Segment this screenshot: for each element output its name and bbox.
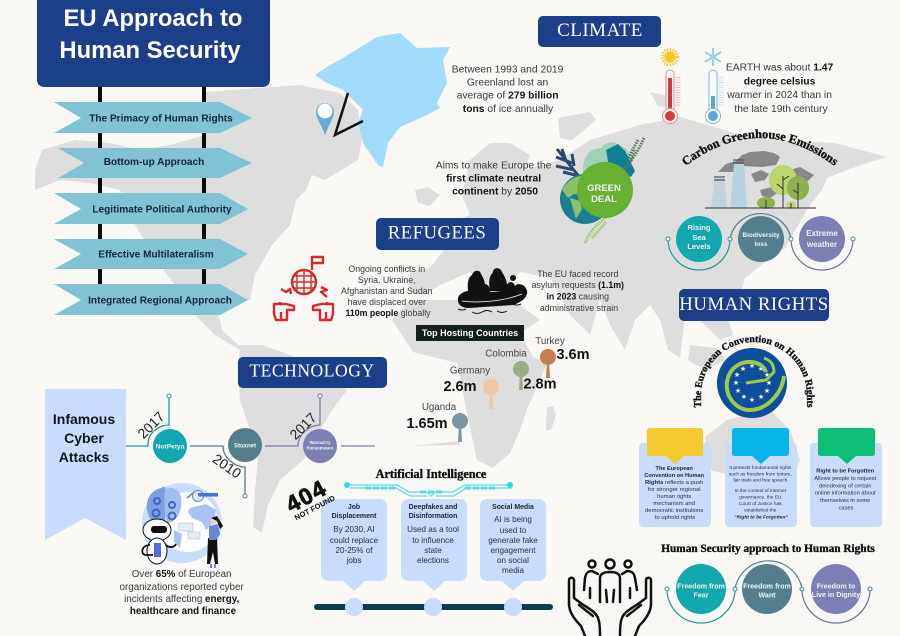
timeline: cyber attacks	[126, 394, 375, 498]
node: WannaCry 2017	[286, 409, 337, 463]
pin: Germany: Germany	[450, 366, 490, 376]
text: climate neutral: Aims to make Europe the	[436, 160, 552, 172]
circle: biodiversity loss: loss	[754, 241, 768, 248]
arrow: legitimate political authority	[54, 193, 248, 224]
text: earth warming: EARTH was about 1.47	[726, 62, 833, 74]
circle: freedom from want: Want	[758, 592, 776, 600]
card: European Convention: to uphold rights	[655, 515, 695, 521]
heading: technology	[238, 357, 387, 388]
text: Greenland ice loss: Greenland lost an	[467, 78, 548, 88]
icon: council of Europe logo: ★	[740, 365, 746, 373]
text: Greenland ice loss: Between 1993 and 2019	[452, 64, 564, 76]
card: deepfakes and disinformation: Used as a tool	[407, 525, 459, 534]
icon: council of Europe logo: ★	[758, 365, 764, 373]
card: fundamental rights: established the	[744, 508, 777, 514]
text: ongoing conflicts: Afghanistan and Sudan	[341, 286, 433, 296]
circle: biodiversity loss	[738, 216, 784, 262]
card: right to be forgotten: online information about	[815, 490, 876, 496]
card: deepfakes and disinformation: Deepfakes and	[409, 504, 457, 511]
card: job displacement: jobs	[346, 556, 361, 565]
text: 65 percent cyber incidents: incidents affecting energy,	[124, 594, 239, 605]
pin: Uganda	[406, 402, 468, 442]
pin: Germany	[443, 366, 499, 409]
card: European Convention: for stronger regional	[648, 487, 701, 493]
card: deepfakes and disinformation: to influence	[412, 536, 454, 545]
pin: Uganda: Uganda	[422, 402, 457, 413]
node: WannaCry 2017: WannaCry	[309, 440, 331, 445]
card: job displacement: 20-25% of	[336, 546, 373, 555]
text: Greenland ice loss: average of 279 billion	[457, 90, 559, 102]
panel: AI impacts	[314, 499, 553, 616]
circle: extreme weather: Extreme	[806, 229, 838, 238]
heading: human rights	[679, 289, 829, 321]
text: asylum requests: The EU faced record	[537, 269, 618, 279]
icon: council of Europe logo: ★	[764, 387, 770, 395]
pin: Uganda: 1.65m	[406, 416, 448, 432]
text: Greenland ice loss: tons of ice annually	[463, 104, 553, 115]
arrow: primacy of human rights: The Primacy of Human Rights	[89, 114, 233, 124]
card: job displacement: could replace	[330, 536, 379, 545]
banner: infamous cyber attacks: Attacks	[59, 449, 109, 465]
heading: climate	[538, 16, 661, 47]
world map background	[35, 85, 887, 533]
arrow: effective multilateralism	[54, 239, 248, 269]
arrow: integrated regional approach: Integrated Regional Approach	[88, 296, 232, 306]
icon: black check arrow	[335, 93, 363, 135]
circle: freedom from want	[742, 564, 792, 614]
card: social media: on social	[497, 556, 529, 565]
circle: rising sea levels: Rising	[688, 223, 711, 232]
node: Stuxnet 2010	[210, 428, 262, 482]
card: fundamental rights: fair trials and free speech	[733, 478, 788, 484]
icon: cold thermometer with snowflake	[705, 48, 721, 124]
card: fundamental rights: In the context of internet	[735, 488, 787, 494]
icon: council of Europe logo: ★	[735, 387, 741, 395]
heading: human security approach: Human Security approach to Human Rights	[661, 543, 875, 555]
card: deepfakes and disinformation	[401, 499, 467, 616]
card: right to be forgotten: cases	[839, 506, 854, 512]
card: fundamental rights: It protects fundamental rights	[729, 465, 792, 471]
text: earth warming: degree celsius	[744, 76, 816, 88]
arrow: bottom-up approach: Bottom-up Approach	[104, 157, 204, 168]
green badge	[577, 162, 633, 218]
card: fundamental rights: Court of Justice has	[739, 501, 782, 507]
heading: human rights: HUMAN RIGHTS	[679, 294, 829, 315]
icon: map pin	[316, 103, 334, 135]
heading: refugees	[376, 218, 499, 250]
panel: freedoms	[665, 561, 872, 623]
card: job displacement: By 2030, AI	[333, 525, 375, 534]
banner: infamous cyber attacks	[45, 389, 126, 540]
icon: council of Europe logo: ★	[749, 396, 755, 404]
node: WannaCry 2017: 2017	[286, 409, 320, 443]
node: NotPetya 2017: 2017	[134, 408, 168, 442]
arrow: integrated regional approach	[54, 284, 248, 315]
card: deepfakes and disinformation: elections	[417, 556, 449, 565]
icon: 404 not found: NOT FOUND	[293, 493, 337, 522]
node: Stuxnet 2010: Stuxnet	[234, 444, 256, 450]
text: asylum requests: administrative strain	[540, 303, 618, 313]
card: social media	[480, 499, 546, 616]
pin: Turkey: Turkey	[535, 336, 565, 347]
circle: extreme weather: weather	[806, 240, 837, 249]
text: ongoing conflicts: 110m people globally	[345, 308, 431, 318]
card: European Convention	[639, 428, 711, 527]
illustration: AI robot and globe	[142, 483, 223, 568]
text: climate neutral: first climate neutral	[446, 174, 541, 184]
text: 65 percent cyber incidents: Over 65% of European	[132, 569, 231, 580]
arrow: primacy of human rights	[54, 102, 252, 133]
heading: European Convention on Human Rights: The European Convention on Human Rights	[693, 335, 815, 408]
icon: council of Europe logo: ★	[741, 393, 747, 401]
text: earth warming: warmer in 2024 than in	[726, 90, 832, 101]
card: deepfakes and disinformation: state	[424, 546, 442, 555]
icon: refugee boat	[458, 268, 527, 314]
banner: infamous cyber attacks: Infamous	[53, 411, 115, 427]
icon: people in hands	[569, 560, 651, 636]
circle: freedom to live in dignity	[811, 564, 861, 614]
text: 65 percent cyber incidents: healthcare and finance	[130, 606, 237, 617]
leaves behind the badge	[556, 138, 644, 243]
circle: freedom to live in dignity: Live in Dignity	[812, 591, 860, 599]
card: fundamental rights: governance, the EU	[739, 494, 782, 500]
heading: carbon greenhouse emissions: Carbon Greenhouse Emissions	[682, 129, 838, 166]
card: right to be forgotten: themselves in some	[820, 498, 870, 504]
circle: freedom from fear	[676, 564, 726, 614]
illustration: factories and trees	[705, 151, 816, 209]
timeline bar	[314, 604, 553, 610]
pin: Colombia: 2.8m	[523, 376, 557, 392]
card: social media: generate fake	[488, 536, 538, 545]
circle: freedom from fear: Freedom from	[677, 582, 725, 590]
arrow: legitimate political authority: Legitimate Political Authority	[92, 204, 232, 216]
card: job displacement: Job	[348, 504, 360, 511]
icon: green deal: GREEN	[587, 183, 621, 194]
card: right to be forgotten: Allows people to request	[814, 476, 877, 482]
icon: council of Europe logo: ★	[758, 393, 764, 401]
heading: refugees: REFUGEES	[388, 222, 486, 244]
arrow: bottom-up approach	[58, 148, 252, 178]
card: job displacement	[321, 499, 387, 616]
icon: council of Europe logo: ★	[733, 379, 739, 387]
card: right to be forgotten	[810, 428, 882, 527]
card: European Convention: democratic institutions	[645, 508, 703, 514]
banner: infamous cyber attacks: Cyber	[64, 430, 104, 446]
text: asylum requests: asylum requests (1.1m)	[532, 280, 624, 290]
card: right to be forgotten: deindexing of certain	[819, 484, 871, 490]
circle: freedom from fear: Fear	[694, 592, 709, 600]
heading: climate: CLIMATE	[557, 20, 643, 41]
text: asylum requests: in 2023 causing	[546, 292, 609, 302]
circle: rising sea levels: Levels	[687, 242, 711, 251]
card: European Convention: mechanism and	[653, 501, 695, 507]
card: European Convention: human rights	[657, 494, 691, 500]
pin: Turkey	[535, 336, 590, 378]
panel: climate impacts	[666, 214, 855, 270]
card: European Convention: Convention on Human	[644, 473, 705, 479]
circle: rising sea levels	[676, 216, 722, 262]
decoration: circuit lines	[344, 482, 513, 496]
icon: conflict	[274, 257, 333, 320]
node: WannaCry 2017: Ransomware	[307, 446, 334, 450]
card: fundamental rights: such as freedom from torture,	[729, 472, 792, 478]
icon: hot thermometer with sun	[662, 50, 678, 124]
card: deepfakes and disinformation: Disinformation	[409, 513, 457, 520]
card: European Convention: Rights reflects a push	[645, 480, 703, 486]
node: NotPetya 2017: NotPetya	[156, 444, 185, 450]
text: ongoing conflicts: Syria. Ukraine,	[358, 275, 416, 285]
circle: freedom to live in dignity: Freedom to	[817, 582, 856, 590]
icon: council of Europe logo: ★	[764, 371, 770, 379]
panel: human rights cards	[639, 428, 882, 527]
node: Stuxnet 2010: 2010	[210, 451, 245, 482]
icon: green deal: DEAL	[591, 194, 617, 205]
icon: 404 not found: 404	[281, 474, 331, 517]
icon: council of Europe logo: ★	[766, 379, 772, 387]
label: top hosting countries: Top Hosting Countries	[422, 328, 518, 338]
heading: technology: TECHNOLOGY	[249, 360, 375, 380]
panel: top hosting countries	[406, 325, 590, 442]
pin: Germany: 2.6m	[443, 379, 477, 395]
card: European Convention: The European	[656, 466, 693, 472]
icon: council of Europe logo	[717, 348, 787, 418]
text: 65 percent cyber incidents: organizations reported cyber	[120, 582, 244, 593]
text: ongoing conflicts: have displaced over	[348, 297, 426, 307]
text: ongoing conflicts: Ongoing conflicts in	[348, 264, 425, 274]
text: climate neutral: continent by 2050	[452, 186, 538, 198]
earth	[560, 174, 610, 224]
icon: council of Europe logo: ★	[749, 362, 755, 370]
card: social media: used to	[500, 526, 527, 535]
title	[37, 0, 270, 87]
circle: extreme weather	[799, 216, 845, 262]
pin: Turkey: 3.6m	[556, 347, 590, 363]
card: social media: engagement	[490, 546, 536, 555]
card: social media: media	[502, 566, 525, 575]
Greenland highlighted on map	[315, 33, 450, 167]
title: EU Approach to	[64, 5, 242, 32]
circle: freedom from want: Freedom from	[743, 582, 791, 590]
card: fundamental rights: “Right to be Forgotten”	[734, 514, 788, 520]
card: social media: Social Media	[492, 504, 534, 511]
text: earth warming: the late 19th century	[734, 104, 829, 115]
card: job displacement: Displacement	[332, 513, 377, 520]
card: right to be forgotten: Right to be Forgotten	[816, 468, 875, 474]
card: social media: AI is being	[494, 515, 532, 524]
signpost poles	[98, 87, 206, 285]
icon: green deal	[556, 138, 644, 243]
pin: Colombia	[485, 348, 557, 392]
title: Human Security	[59, 37, 241, 64]
circle: rising sea levels: Sea	[692, 233, 706, 242]
circle: biodiversity loss: Biodiversity	[742, 232, 780, 239]
arrow: effective multilateralism: Effective Multilateralism	[98, 250, 214, 260]
heading: artificial intelligence: Artificial Intelligence	[376, 467, 487, 481]
node: NotPetya 2017	[134, 408, 187, 463]
card: fundamental rights	[725, 428, 797, 527]
icon: council of Europe logo: ★	[734, 371, 740, 379]
panel: approach arrows	[54, 102, 252, 315]
pin: Colombia: Colombia	[485, 348, 527, 360]
label: top hosting countries	[416, 325, 524, 341]
